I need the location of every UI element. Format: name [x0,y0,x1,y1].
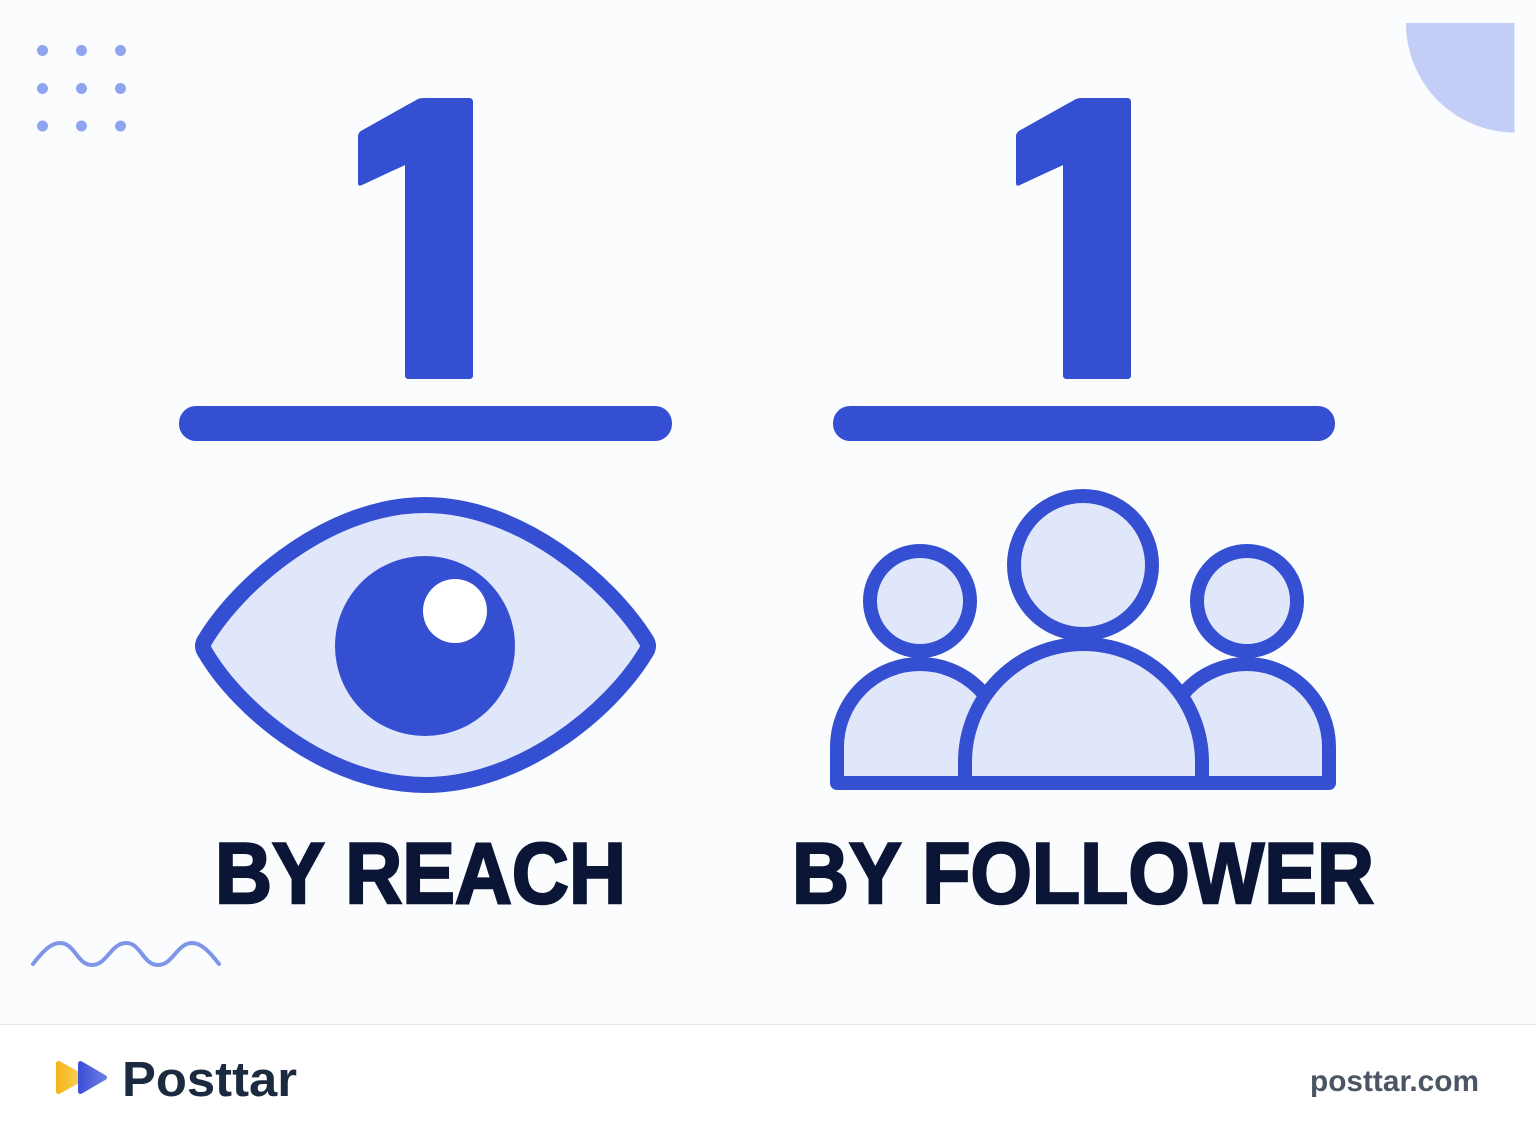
label: by reach: BY REACH [215,826,626,922]
center person [965,496,1202,783]
right person [1164,551,1329,783]
eye pupil [335,556,515,736]
decoration: dot grid [37,45,126,132]
eye outline [203,505,648,785]
icon: eye [203,505,648,785]
icon: group of three people [837,496,1329,783]
fraction bar: right [833,406,1335,441]
logo wordmark: Posttar [122,1053,297,1107]
eye highlight [423,579,487,643]
numerator: right number 1: 1 [962,17,1184,464]
label: by follower: BY FOLLOWER [792,826,1374,922]
numerator: left number 1: 1 [304,17,526,464]
decoration: wave [33,943,219,965]
footer [0,1024,1536,1136]
fraction bar: left [179,406,672,441]
logo icon [58,1064,104,1092]
left person [837,551,1003,783]
website url: posttar.com [1310,1065,1479,1098]
decoration: corner quarter circle [1406,23,1514,132]
